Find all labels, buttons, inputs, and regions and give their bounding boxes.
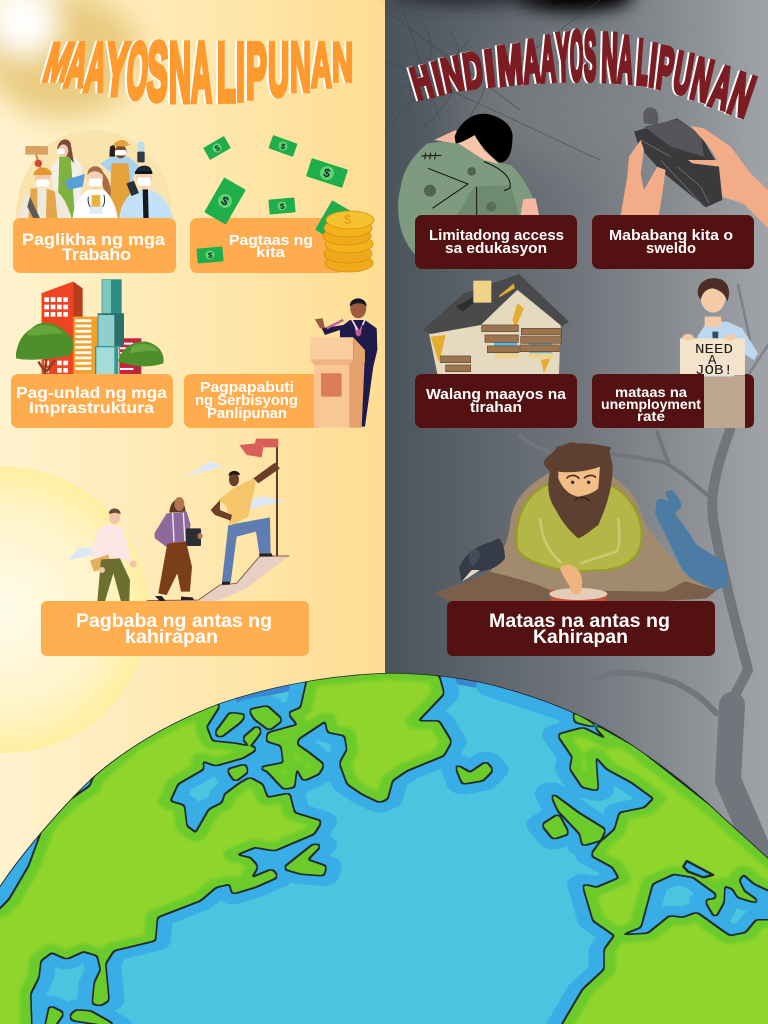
title: Maayos na Lipunan: N (290, 30, 311, 107)
sign text: NEED A JOB: NEED (695, 342, 733, 358)
label box: Pagbaba ng antas ng kahirapan (41, 601, 309, 656)
title: Hindi Maayos na Lipunan: N (437, 48, 468, 103)
title: Hindi Maayos na Lipunan: O (570, 17, 583, 95)
icon: falling money and coins: $ (279, 142, 287, 152)
title: Maayos na Lipunan: M (37, 31, 79, 93)
label box: Pagtaas ng kita: kita (256, 244, 286, 261)
title: Hindi Maayos na Lipunan: N (601, 19, 619, 96)
title: Maayos na Lipunan: L (217, 27, 236, 119)
label box: Mababang kita o sweldo: Mababang kita o (609, 227, 733, 244)
label box: mataas na unemployment rate (592, 374, 754, 428)
sign text: NEED A JOB: JOB! (695, 363, 733, 379)
sign text: NEED A JOB (695, 342, 733, 379)
label box: mataas na unemployment rate: mataas na (615, 384, 687, 400)
icon: falling money and coins: $ (280, 202, 285, 211)
label box: Mataas na antas ng Kahirapan: Mataas na antas ng (489, 611, 670, 632)
icon: falling money and coins: $ (218, 193, 232, 209)
title: Hindi Maayos na Lipunan: U (669, 41, 697, 108)
globe (0, 672, 768, 1024)
icon: city buildings and trees (16, 279, 164, 374)
sign text: NEED A JOB: A (708, 353, 717, 369)
title: Hindi Maayos na Lipunan: N (722, 60, 762, 130)
icon: falling money and coins: $ (344, 212, 352, 227)
title: Hindi Maayos na Lipunan: A (616, 23, 635, 97)
icon: damaged house (422, 274, 569, 374)
title: Maayos na Lipunan: I (236, 27, 245, 118)
icon: falling money and coins: $ (322, 165, 332, 181)
title: Maayos na Lipunan: O (124, 26, 151, 115)
title: Maayos na Lipunan: S (145, 26, 170, 118)
title: Hindi Maayos na Lipunan: D (460, 43, 486, 100)
label box: Paglikha ng mga Trabaho: Paglikha ng mga (22, 230, 166, 249)
title: Hindi Maayos na Lipunan: A (704, 53, 740, 122)
icon: falling money and coins: $ (213, 143, 222, 153)
title: Maayos na Lipunan: A (60, 30, 95, 100)
icon: man holding NEED A JOB sign (680, 278, 758, 428)
label box: Mababang kita o sweldo (592, 215, 754, 269)
title: Hindi Maayos na Lipunan: A (540, 24, 557, 96)
panel: right background (385, 0, 768, 1024)
label box: Paglikha ng mga Trabaho (13, 218, 176, 273)
title: Hindi Maayos na Lipunan: N (686, 45, 719, 114)
title: Maayos na Lipunan: N (169, 26, 191, 120)
label box: Pagbaba ng antas ng kahirapan: Pagbaba ng antas ng (76, 611, 272, 632)
label box: mataas na unemployment rate: unemployment (601, 396, 701, 412)
label box: Pagtaas ng kita: Pagtaas ng (229, 232, 313, 249)
title: Hindi Maayos na Lipunan (405, 17, 762, 130)
label box: Pagpapabuti ng Serbisyong Panlipunan: Panlipunan (207, 405, 287, 422)
title: Maayos na Lipunan: U (268, 28, 289, 113)
title: Hindi Maayos na Lipunan: P (653, 34, 678, 103)
label box: Pagbaba ng antas ng kahirapan: kahirapan (125, 627, 218, 648)
label box: Limitadong access sa edukasyon: sa edukasyon (445, 240, 547, 257)
panel: left background (0, 0, 385, 1024)
label box: Paglikha ng mga Trabaho: Trabaho (62, 245, 131, 264)
label box: mataas na unemployment rate: rate (637, 408, 665, 424)
icon: climbers reaching flag (68, 439, 289, 603)
title: Hindi Maayos na Lipunan: I (647, 32, 660, 99)
title: Hindi Maayos na Lipunan: I (428, 53, 448, 105)
label box: Mataas na antas ng Kahirapan: Kahirapan (533, 627, 628, 648)
title: Hindi Maayos na Lipunan: A (521, 27, 542, 96)
label box: Walang maayos na tirahan: Walang maayos na (426, 386, 567, 403)
icon: sad student in patched jacket (398, 114, 539, 255)
label box: Limitadong access sa edukasyon: Limitadong access (429, 227, 564, 244)
icon: speaker at podium (310, 298, 377, 428)
title: Hindi Maayos na Lipunan: Y (556, 20, 571, 95)
icon: hands holding empty wallet (621, 107, 768, 228)
title: Maayos na Lipunan: A (81, 30, 112, 107)
label box: Mataas na antas ng Kahirapan (447, 601, 715, 656)
title: Hindi Maayos na Lipunan: I (482, 41, 498, 98)
icon: group of workers (16, 130, 173, 218)
title: Maayos na Lipunan (37, 26, 353, 120)
icon: homeless man with dog and cup (435, 442, 727, 602)
label box: Pag-unlad ng mga Imprastruktura: Pag-unlad ng mga (16, 385, 167, 402)
title: Maayos na Lipunan: P (246, 26, 267, 115)
label box: Walang maayos na tirahan: tirahan (470, 399, 522, 416)
label box: Mababang kita o sweldo: sweldo (646, 240, 696, 257)
icon: falling money and coins: $ (208, 251, 213, 260)
label box: Pag-unlad ng mga Imprastruktura (11, 374, 173, 428)
title: Maayos na Lipunan: A (311, 31, 332, 101)
label box: Pagtaas ng kita (190, 218, 345, 273)
title: Hindi Maayos na Lipunan: S (584, 17, 596, 95)
title: Hindi Maayos na Lipunan: M (495, 34, 525, 98)
label box: Walang maayos na tirahan (415, 374, 577, 428)
label box: Pag-unlad ng mga Imprastruktura: Imprastruktura (29, 400, 154, 417)
title: Maayos na Lipunan: A (191, 27, 212, 120)
title: Maayos na Lipunan: Y (101, 28, 132, 112)
title: Maayos na Lipunan: N (332, 32, 353, 94)
label box: Limitadong access sa edukasyon (415, 215, 577, 269)
label box: Pagpapabuti ng Serbisyong Panlipunan: Pagpapabuti (200, 379, 294, 396)
title: Hindi Maayos na Lipunan: H (405, 56, 439, 109)
icon: falling money and coins (196, 135, 374, 272)
title: Hindi Maayos na Lipunan: L (635, 26, 651, 98)
label box: Pagpapabuti ng Serbisyong Panlipunan: ng Serbisyong (195, 392, 298, 409)
label box: Pagpapabuti ng Serbisyong Panlipunan (184, 374, 324, 428)
